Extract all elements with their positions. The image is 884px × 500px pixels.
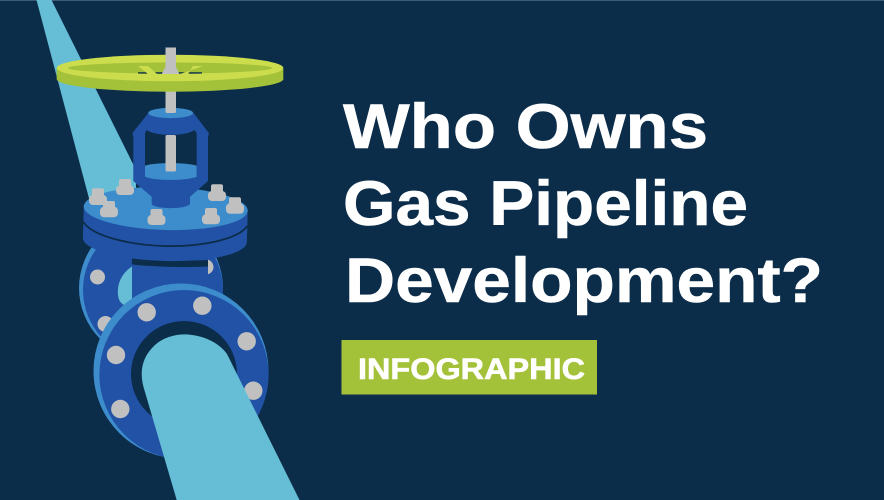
- flange bolts: [107, 296, 262, 418]
- rear pipe opening: [118, 266, 132, 307]
- stem top: [162, 48, 179, 74]
- title: [343, 92, 823, 316]
- infographic badge: INFOGRAPHIC: [358, 353, 585, 386]
- upper pipe: [36, 0, 136, 240]
- title: Who Owns: [343, 92, 708, 162]
- handwheel: [57, 48, 283, 92]
- lower pipe: [142, 334, 300, 500]
- title: Development?: [345, 246, 823, 316]
- bonnet flange: [82, 185, 248, 263]
- title: Gas Pipeline: [343, 169, 748, 239]
- wheel spokes: [138, 66, 203, 74]
- rear flange bolts: [90, 260, 214, 332]
- flange opening: [131, 321, 237, 427]
- rear flange: [79, 216, 223, 360]
- valve yoke: [132, 108, 209, 208]
- front flange: [94, 284, 269, 459]
- valve stem: [166, 90, 176, 172]
- flange nuts: [89, 179, 244, 225]
- valve body: [132, 255, 208, 315]
- infographic badge: [342, 340, 597, 394]
